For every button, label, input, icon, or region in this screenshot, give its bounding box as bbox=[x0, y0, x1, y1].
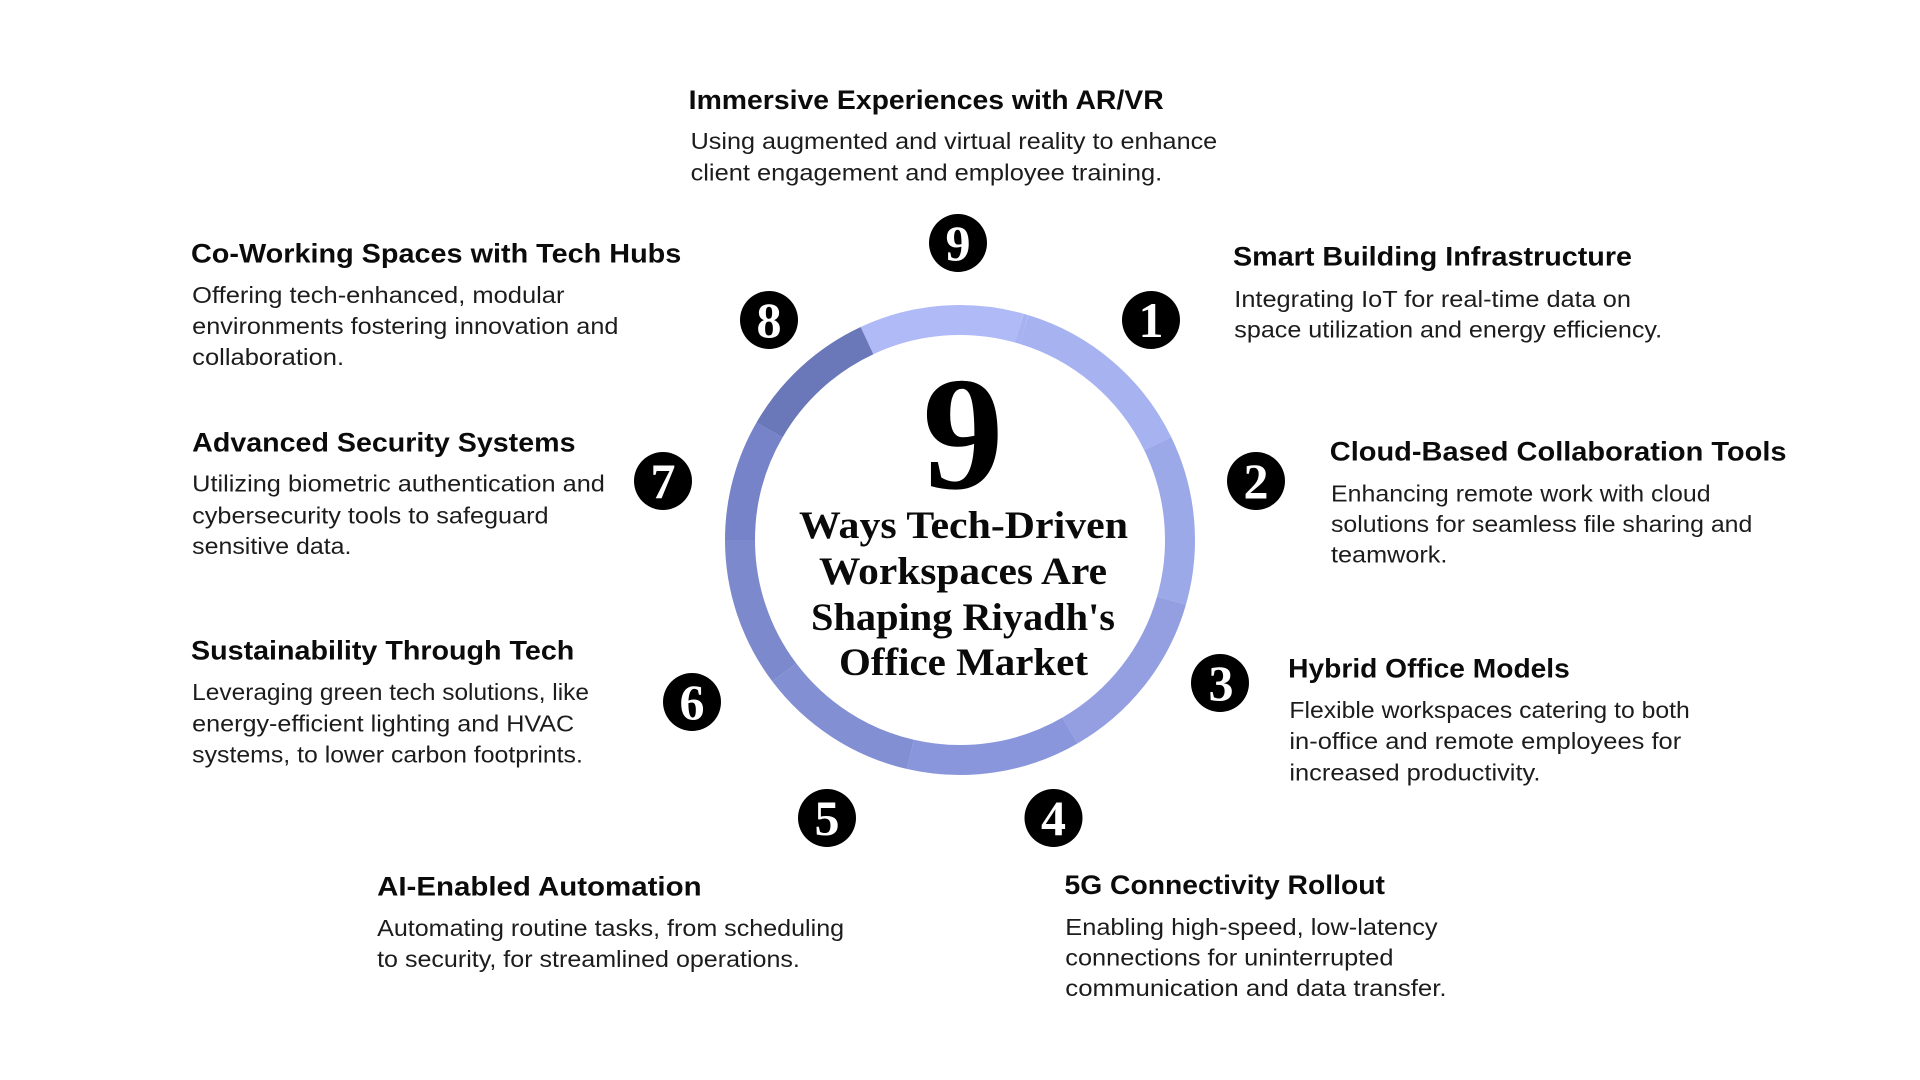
text block 6: Sustainability Through Tech: systems, to lower carbon footprints. bbox=[192, 741, 583, 767]
badge 1 bbox=[1122, 291, 1180, 349]
text block 5: AI-Enabled Automation: Automating routine tasks, from scheduling bbox=[377, 915, 844, 941]
text block 6: Sustainability Through Tech bbox=[191, 636, 589, 767]
badge 4 bbox=[1024, 789, 1082, 847]
text block 2: Cloud-Based Collaboration Tools bbox=[1330, 437, 1786, 568]
text block 9: Immersive Experiences with AR/VR: Immersive Experiences with AR/VR bbox=[689, 85, 1164, 115]
text block 2: Cloud-Based Collaboration Tools: teamwork. bbox=[1331, 542, 1447, 568]
text block 4: 5G Connectivity Rollout: 5G Connectivity Rollout bbox=[1064, 870, 1385, 900]
text block 3: Hybrid Office Models: in-office and remote employees for bbox=[1289, 728, 1682, 754]
big number 9: 9 bbox=[922, 345, 1004, 524]
badge 3: 3 bbox=[1208, 655, 1234, 711]
central title bbox=[799, 345, 1128, 684]
badge 8 bbox=[740, 291, 798, 349]
badge 9: 9 bbox=[946, 215, 970, 271]
text block 8: Co-Working Spaces with Tech Hubs bbox=[191, 239, 681, 370]
badge 7: 7 bbox=[650, 453, 676, 509]
title text: Shaping Riyadh's bbox=[811, 596, 1115, 639]
text block 4: 5G Connectivity Rollout: connections for uninterrupted bbox=[1065, 945, 1394, 971]
text block 4: 5G Connectivity Rollout bbox=[1064, 870, 1447, 1001]
badge 9 bbox=[929, 214, 987, 272]
text block 6: Sustainability Through Tech: energy-efficient lighting and HVAC bbox=[192, 711, 574, 737]
text block 1: Smart Building Infrastructure: Integrating IoT for real-time data on bbox=[1234, 286, 1631, 312]
text block 6: Sustainability Through Tech: Leveraging green tech solutions, like bbox=[192, 679, 589, 705]
text block 1: Smart Building Infrastructure: space utilization and energy efficiency. bbox=[1234, 316, 1662, 342]
text block 7: Advanced Security Systems: cybersecurity tools to safeguard bbox=[192, 502, 549, 528]
text block 7: Advanced Security Systems: Utilizing biometric authentication and bbox=[192, 471, 605, 497]
text block 8: Co-Working Spaces with Tech Hubs: Co-Working Spaces with Tech Hubs bbox=[191, 239, 681, 269]
title text: Office Market bbox=[839, 641, 1088, 684]
text block 3: Hybrid Office Models bbox=[1288, 654, 1690, 786]
text block 2: Cloud-Based Collaboration Tools: Enhancing remote work with cloud bbox=[1331, 480, 1711, 506]
text block 2: Cloud-Based Collaboration Tools: solutions for seamless file sharing and bbox=[1331, 511, 1752, 537]
badge 7 bbox=[634, 452, 692, 510]
badge 2 bbox=[1227, 452, 1285, 510]
text block 1: Smart Building Infrastructure: Smart Building Infrastructure bbox=[1233, 242, 1632, 272]
text block 3: Hybrid Office Models: Hybrid Office Models bbox=[1288, 654, 1570, 684]
text block 5: AI-Enabled Automation: AI-Enabled Automation bbox=[377, 872, 702, 902]
text block 9: Immersive Experiences with AR/VR: Using augmented and virtual reality to enhance bbox=[691, 128, 1217, 154]
title text bbox=[799, 504, 1128, 684]
ring: nine coloured segments bbox=[740, 320, 1180, 760]
text block 8: Co-Working Spaces with Tech Hubs: collaboration. bbox=[192, 344, 344, 370]
text block 1: Smart Building Infrastructure bbox=[1233, 242, 1662, 342]
text block 3: Hybrid Office Models: increased productivity. bbox=[1289, 760, 1540, 786]
badge 8: 8 bbox=[756, 292, 782, 348]
text block 9: Immersive Experiences with AR/VR: client engagement and employee training. bbox=[691, 160, 1162, 186]
text block 7: Advanced Security Systems: sensitive data. bbox=[192, 533, 351, 559]
badge 5 bbox=[798, 789, 856, 847]
text block 7: Advanced Security Systems bbox=[192, 428, 605, 559]
badge 6 bbox=[663, 673, 721, 731]
text block 5: AI-Enabled Automation: to security, for streamlined operations. bbox=[377, 946, 800, 972]
text block 8: Co-Working Spaces with Tech Hubs: environments fostering innovation and bbox=[192, 313, 618, 339]
title text: Workspaces Are bbox=[819, 550, 1107, 593]
text block 9: Immersive Experiences with AR/VR bbox=[689, 85, 1217, 186]
text block 6: Sustainability Through Tech: Sustainability Through Tech bbox=[191, 636, 574, 666]
badge 6: 6 bbox=[680, 674, 704, 730]
title text: Ways Tech-Driven bbox=[799, 504, 1128, 547]
text block 2: Cloud-Based Collaboration Tools: Cloud-Based Collaboration Tools bbox=[1330, 437, 1786, 467]
text block 5: AI-Enabled Automation bbox=[377, 872, 844, 972]
badge 1: 1 bbox=[1138, 292, 1164, 348]
text block 3: Hybrid Office Models: Flexible workspaces catering to both bbox=[1289, 697, 1690, 723]
badge 5: 5 bbox=[814, 790, 840, 846]
text block 4: 5G Connectivity Rollout: communication and data transfer. bbox=[1065, 975, 1447, 1001]
badge 4: 4 bbox=[1041, 790, 1066, 846]
text block 8: Co-Working Spaces with Tech Hubs: Offering tech-enhanced, modular bbox=[192, 282, 565, 308]
badge 3 bbox=[1191, 654, 1249, 712]
text block 7: Advanced Security Systems: Advanced Security Systems bbox=[192, 428, 575, 458]
text block 4: 5G Connectivity Rollout: Enabling high-speed, low-latency bbox=[1065, 914, 1438, 940]
badge 2: 2 bbox=[1244, 453, 1268, 509]
